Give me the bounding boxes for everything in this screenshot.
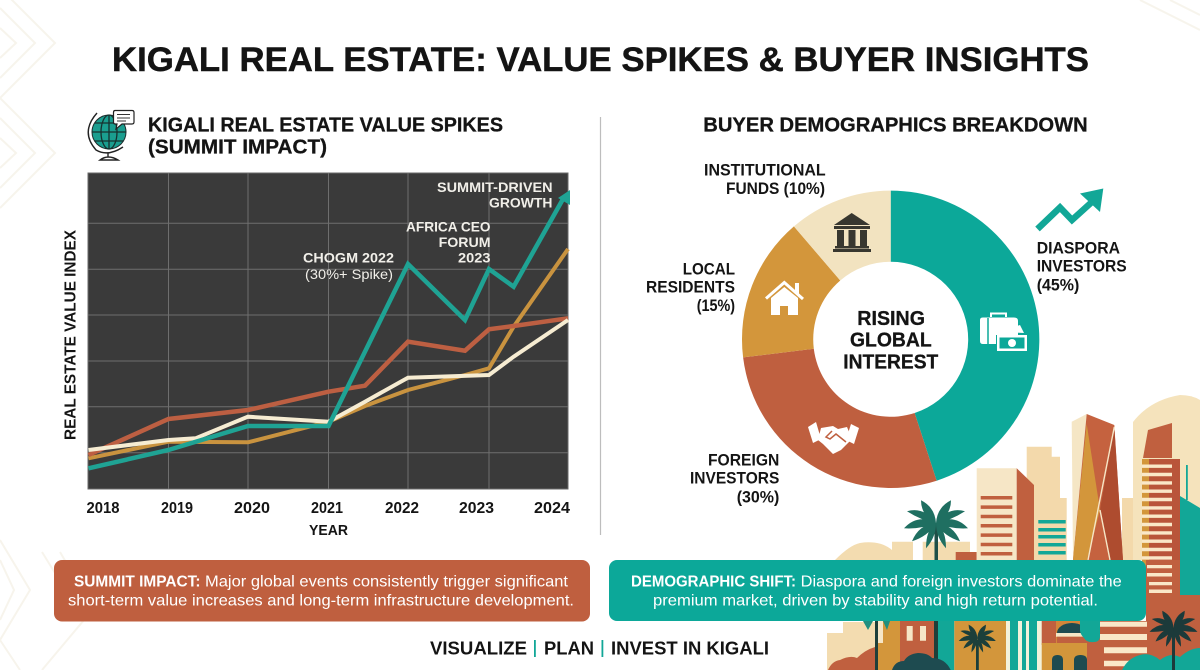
chart heading: (SUMMIT IMPACT) bbox=[148, 136, 327, 158]
annotation: Africa CEO Forum 2023 bbox=[406, 219, 491, 266]
x axis year labels: 2024 bbox=[534, 500, 570, 517]
icon: house bbox=[766, 282, 803, 315]
x axis year labels: 2018 bbox=[86, 500, 120, 517]
label: foreign investors: FOREIGN bbox=[708, 451, 779, 469]
center label bbox=[843, 308, 938, 373]
segment: local residents 15% bbox=[742, 226, 840, 357]
footer tagline: VISUALIZE bbox=[430, 637, 527, 658]
x axis year labels bbox=[86, 500, 570, 517]
label: local residents bbox=[646, 260, 735, 315]
icon: handshake bbox=[808, 422, 859, 454]
label: local residents: RESIDENTS bbox=[646, 279, 735, 297]
annotation: summit-driven growth: SUMMIT-DRIVEN bbox=[437, 179, 552, 195]
label: local residents: LOCAL bbox=[683, 260, 735, 278]
center label: INTEREST bbox=[843, 351, 938, 373]
callout: demographic shift bbox=[609, 560, 1146, 621]
skyline illustration bbox=[827, 395, 1200, 670]
demographics heading: BUYER DEMOGRAPHICS BREAKDOWN bbox=[703, 115, 1088, 137]
label: diaspora investors: (45%) bbox=[1037, 276, 1079, 294]
label: foreign investors bbox=[690, 451, 779, 506]
callout: demographic shift: DEMOGRAPHIC SHIFT: bbox=[631, 574, 796, 590]
footer tagline: INVEST IN KIGALI bbox=[611, 637, 769, 658]
x axis year labels: 2019 bbox=[161, 500, 193, 517]
annotation: Africa CEO Forum 2023: AFRICA CEO bbox=[406, 219, 491, 235]
annotation: CHOGM 2022: CHOGM 2022 bbox=[303, 250, 394, 266]
annotation: summit-driven growth bbox=[437, 179, 552, 211]
label: diaspora investors: DIASPORA bbox=[1037, 239, 1120, 257]
icon: globe with speech bubble bbox=[88, 110, 134, 160]
panel: value spikes chart bbox=[62, 110, 570, 539]
label: institutional funds: INSTITUTIONAL bbox=[704, 162, 826, 180]
arrow head bbox=[558, 190, 570, 205]
chart heading bbox=[148, 115, 503, 158]
callout: demographic shift: premium market, driven by stability and high return potential. bbox=[653, 593, 1098, 610]
icon: bank bbox=[833, 213, 871, 252]
label: local residents: (15%) bbox=[697, 297, 735, 315]
chart heading: KIGALI REAL ESTATE VALUE SPIKES bbox=[148, 115, 503, 137]
footer tagline: PLAN bbox=[544, 637, 594, 658]
center label: GLOBAL bbox=[850, 330, 932, 352]
callout: demographic shift: Diaspora and foreign investors dominate the bbox=[801, 574, 1122, 590]
annotation: CHOGM 2022 bbox=[303, 250, 394, 282]
x axis year labels: 2022 bbox=[385, 500, 419, 517]
series: cream bbox=[88, 320, 568, 450]
callout: summit impact bbox=[54, 560, 590, 622]
segment: foreign investors 30% bbox=[743, 349, 937, 488]
label: institutional funds: FUNDS (10%) bbox=[726, 180, 825, 198]
label: foreign investors: (30%) bbox=[737, 488, 779, 506]
title: KIGALI REAL ESTATE: VALUE SPIKES & BUYER INSIGHTS bbox=[112, 41, 1089, 79]
icon: growth arrow bbox=[1038, 188, 1103, 229]
annotation: summit-driven growth: GROWTH bbox=[489, 195, 552, 211]
label: institutional funds bbox=[704, 162, 826, 198]
annotation: CHOGM 2022: (30%+ Spike) bbox=[305, 266, 393, 282]
label: diaspora investors bbox=[1037, 239, 1127, 294]
annotation: Africa CEO Forum 2023: 2023 bbox=[458, 250, 491, 266]
series: rust bbox=[88, 318, 568, 455]
callout: summit impact: SUMMIT IMPACT: bbox=[74, 574, 200, 590]
callout: summit impact: short-term value increases and long-term infrastructure development. bbox=[68, 593, 574, 610]
x axis title: YEAR bbox=[309, 522, 348, 539]
series: gold bbox=[88, 249, 568, 458]
x axis year labels: 2020 bbox=[234, 500, 270, 517]
series: teal bbox=[88, 199, 563, 468]
line chart bbox=[88, 173, 570, 489]
label: foreign investors: INVESTORS bbox=[690, 470, 779, 488]
icon: suitcase and money bbox=[980, 314, 1027, 351]
y axis label: REAL ESTATE VALUE INDEX bbox=[62, 229, 80, 440]
label: diaspora investors: INVESTORS bbox=[1037, 258, 1127, 276]
segment: diaspora investors 45% bbox=[891, 191, 1039, 481]
x axis year labels: 2021 bbox=[311, 500, 343, 517]
footer tagline bbox=[430, 637, 769, 658]
center label: RISING bbox=[857, 308, 925, 330]
callout: summit impact: Major global events consistently trigger significant bbox=[205, 574, 569, 590]
donut chart bbox=[742, 191, 1039, 488]
x axis year labels: 2023 bbox=[459, 500, 494, 517]
panel: buyer demographics bbox=[646, 115, 1127, 506]
annotation: Africa CEO Forum 2023: FORUM bbox=[439, 234, 491, 250]
segment: institutional funds 10% bbox=[794, 191, 891, 280]
